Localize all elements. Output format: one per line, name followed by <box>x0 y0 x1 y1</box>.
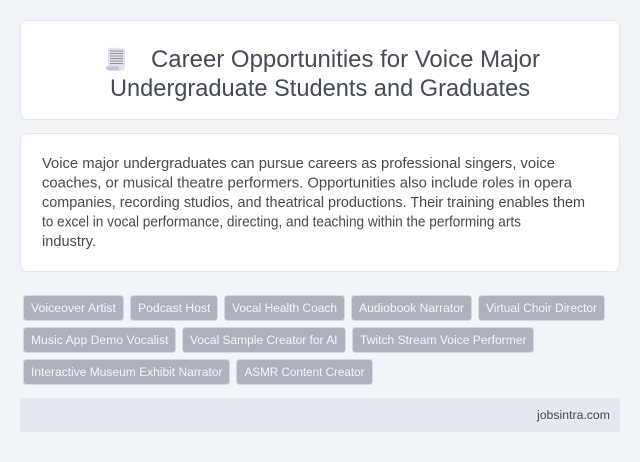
tag: Audiobook Narrator: Audiobook Narrator <box>359 301 464 315</box>
tag: ASMR Content Creator <box>236 360 372 384</box>
tag: Vocal Health Coach: Vocal Health Coach <box>232 301 337 315</box>
tag: Music App Demo Vocalist: Music App Demo Vocalist <box>31 333 169 347</box>
icon: scroll document <box>106 48 125 70</box>
panel: description card <box>20 134 620 272</box>
tag: Vocal Sample Creator for AI <box>182 328 346 352</box>
footer bar <box>20 398 620 432</box>
tag: Twitch Stream Voice Performer: Twitch Stream Voice Performer <box>360 333 526 347</box>
title: Career Opportunities for Voice Major <box>151 46 540 73</box>
tag: Podcast Host <box>130 296 218 320</box>
tag: Interactive Museum Exhibit Narrator <box>24 360 230 384</box>
tag: Podcast Host: Podcast Host <box>138 301 211 315</box>
text block: description: companies, recording studios, and theatrical productions. Their training enables them <box>42 195 585 211</box>
tag: Interactive Museum Exhibit Narrator: Interactive Museum Exhibit Narrator <box>31 365 222 379</box>
tag: Voiceover Artist: Voiceover Artist <box>31 301 117 315</box>
text block: description: coaches, or musical theatre performers. Opportunities also include roles in opera <box>42 176 572 192</box>
title: Undergraduate Students and Graduates <box>110 75 530 102</box>
tag: Twitch Stream Voice Performer <box>352 328 534 352</box>
text block: description: industry. <box>42 234 96 250</box>
tag: Vocal Health Coach <box>224 296 344 320</box>
tag: Music App Demo Vocalist <box>24 328 176 352</box>
tag: Vocal Sample Creator for AI: Vocal Sample Creator for AI <box>190 333 338 347</box>
title <box>110 46 540 102</box>
tag: Audiobook Narrator <box>352 296 472 320</box>
tag: ASMR Content Creator: ASMR Content Creator <box>244 365 364 379</box>
panel: title card <box>20 20 620 120</box>
tag: Virtual Choir Director: Virtual Choir Director <box>486 301 597 315</box>
tag: Voiceover Artist <box>24 296 124 320</box>
text block: description: Voice major undergraduates can pursue careers as professional singers, voice <box>42 156 555 172</box>
tag list: career roles <box>24 296 604 384</box>
footer source text: jobsintra.com <box>536 408 610 422</box>
text block: description <box>42 156 585 250</box>
tag: Virtual Choir Director <box>478 296 604 320</box>
text block: description: to excel in vocal performance, directing, and teaching within the performing arts <box>42 214 521 230</box>
